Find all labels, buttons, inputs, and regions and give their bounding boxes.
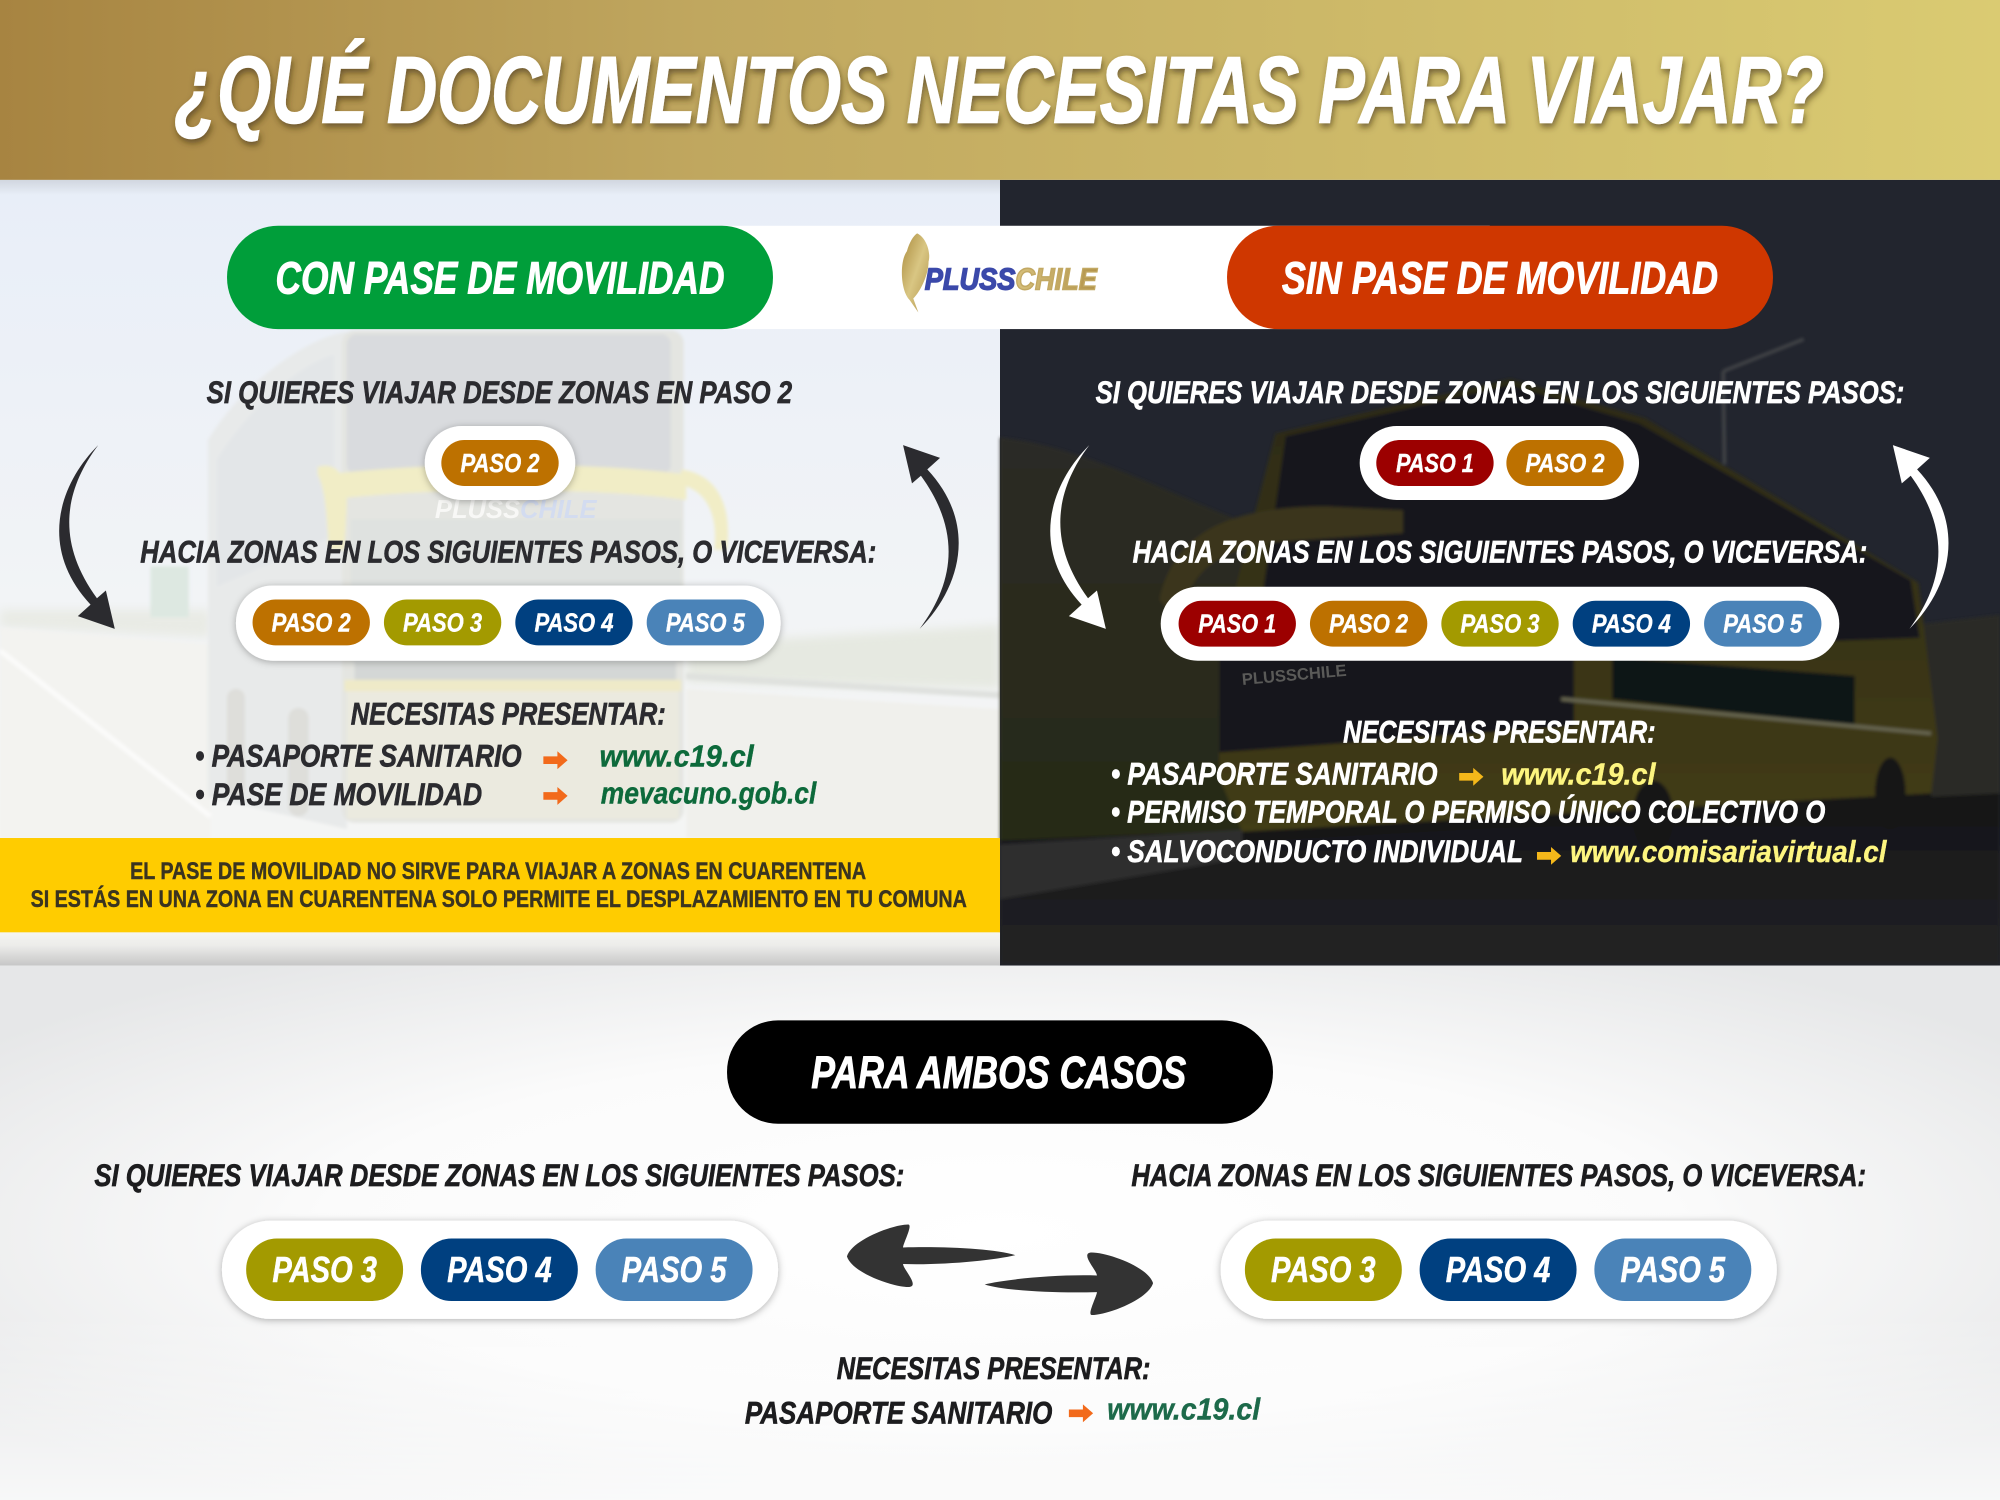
list item: pasaporte: www.c19.cl bbox=[599, 740, 755, 774]
steps: destination: PASO 5 bbox=[1723, 609, 1803, 639]
list item: permiso: • PERMISO TEMPORAL O PERMISO ÚNICO COLECTIVO O bbox=[1111, 795, 1825, 830]
logo band bbox=[510, 226, 1490, 329]
list item: salvoconducto bbox=[1111, 834, 1888, 869]
arrow: curved down bbox=[1050, 445, 1106, 629]
steps: destination: PASO 5 bbox=[666, 607, 745, 637]
bus lettering: PLUSSCHILE bbox=[1241, 661, 1347, 689]
callout: yellow warning bbox=[0, 838, 1000, 932]
text: desde zonas: SI QUIERES VIAJAR DESDE ZONAS EN PASO 2 bbox=[207, 375, 793, 410]
icon: feather logo bbox=[902, 233, 929, 312]
steps: destination: PASO 4 bbox=[534, 607, 614, 637]
heading pill: con pase bbox=[227, 226, 773, 329]
steps: origin bbox=[1360, 426, 1639, 500]
list item: pasaporte: www.c19.cl bbox=[1501, 757, 1657, 791]
steps: origin: PASO 4 bbox=[447, 1250, 552, 1290]
heading pill: con pase: CON PASE DE MOVILIDAD bbox=[276, 252, 724, 303]
heading pill: ambos casos: PARA AMBOS CASOS bbox=[811, 1047, 1186, 1098]
arrow: right bbox=[985, 1253, 1153, 1315]
list item: pasaporte: • PASAPORTE SANITARIO bbox=[195, 739, 522, 774]
list item: pasaporte: www.c19.cl bbox=[1107, 1393, 1262, 1427]
steps: origin bbox=[425, 426, 575, 500]
text: necesitas presentar: NECESITAS PRESENTAR: bbox=[837, 1351, 1151, 1386]
steps: origin: PASO 3 bbox=[272, 1250, 377, 1290]
bus lettering: PLUSSCHILE bbox=[435, 496, 597, 524]
arrow: left bbox=[847, 1224, 1015, 1287]
steps: origin: PASO 1 bbox=[1396, 448, 1474, 478]
header banner bbox=[0, 0, 2000, 195]
steps: destination: PASO 2 bbox=[272, 607, 351, 637]
steps: destination: PASO 3 bbox=[403, 607, 483, 637]
list item: salvoconducto: • SALVOCONDUCTO INDIVIDUAL bbox=[1111, 834, 1523, 869]
steps: destination: PASO 3 bbox=[1271, 1250, 1376, 1290]
steps: destination: PASO 1 bbox=[1198, 609, 1276, 639]
list item: pase de movilidad: mevacuno.gob.cl bbox=[601, 777, 818, 811]
steps: destination: PASO 5 bbox=[1621, 1250, 1726, 1290]
steps: destination: PASO 4 bbox=[1592, 609, 1671, 639]
list item: pasaporte bbox=[745, 1393, 1262, 1430]
heading pill: sin pase: SIN PASE DE MOVILIDAD bbox=[1282, 252, 1718, 303]
steps: origin: PASO 5 bbox=[622, 1250, 727, 1290]
steps: destination bbox=[1221, 1221, 1777, 1319]
steps: origin: PASO 2 bbox=[1526, 448, 1605, 478]
panel: con pase content bbox=[59, 375, 959, 812]
heading pill: sin pase bbox=[1227, 226, 1773, 329]
list item: pase de movilidad bbox=[195, 777, 818, 812]
steps: destination: PASO 4 bbox=[1446, 1250, 1550, 1290]
text: necesitas presentar: NECESITAS PRESENTAR: bbox=[351, 696, 666, 731]
list item: pasaporte: PASAPORTE SANITARIO bbox=[745, 1395, 1052, 1430]
callout: yellow warning: SI ESTÁS EN UNA ZONA EN CUARENTENA SOLO PERMITE EL DESPLAZAMIENTO EN TU COMUNA bbox=[31, 885, 967, 913]
steps: destination bbox=[1161, 587, 1839, 661]
steps: origin: PASO 2 bbox=[460, 448, 540, 478]
list item: salvoconducto: www.comisariavirtual.cl bbox=[1570, 835, 1888, 869]
panel: para ambos casos bbox=[0, 966, 2000, 1500]
arrow: curved up bbox=[903, 445, 959, 629]
steps: origin bbox=[222, 1221, 778, 1319]
list item: pasaporte bbox=[195, 739, 755, 774]
arrow: curved up bbox=[1893, 445, 1948, 629]
panel: con pase background photo bbox=[0, 180, 1000, 966]
steps: destination: PASO 2 bbox=[1329, 609, 1409, 639]
text: hacia zonas: HACIA ZONAS EN LOS SIGUIENTES PASOS, O VICEVERSA: bbox=[140, 535, 876, 570]
list item: pasaporte: • PASAPORTE SANITARIO bbox=[1111, 756, 1437, 791]
steps: destination: PASO 3 bbox=[1460, 609, 1540, 639]
panel: sin pase background photo bbox=[1000, 180, 2000, 966]
callout: yellow warning: EL PASE DE MOVILIDAD NO SIRVE PARA VIAJAR A ZONAS EN CUARENTENA bbox=[130, 858, 866, 885]
steps: destination bbox=[236, 585, 781, 661]
arrow: curved down bbox=[59, 445, 115, 629]
text: necesitas presentar: NECESITAS PRESENTAR: bbox=[1343, 714, 1656, 749]
text: desde zonas: SI QUIERES VIAJAR DESDE ZONAS EN LOS SIGUIENTES PASOS: bbox=[94, 1158, 904, 1193]
heading pill: ambos casos bbox=[727, 1020, 1273, 1124]
list item: pase de movilidad: • PASE DE MOVILIDAD bbox=[195, 777, 482, 812]
logo wordmark: PLUSSCHILE bbox=[925, 263, 1098, 297]
panel: sin pase content bbox=[1050, 375, 1948, 869]
